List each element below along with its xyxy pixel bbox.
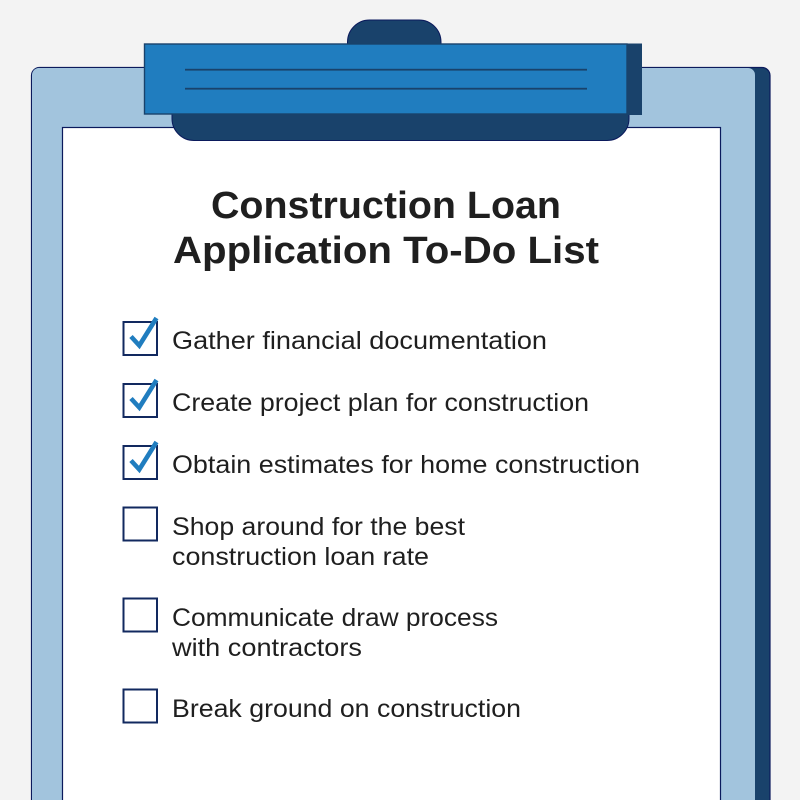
to-do item 4 bbox=[124, 508, 465, 571]
to-do item 2: Create project plan for construction bbox=[172, 389, 589, 417]
title: Construction Loan bbox=[211, 185, 561, 227]
clip line 2 bbox=[185, 88, 587, 90]
paper sheet bbox=[62, 128, 720, 800]
clip front bbox=[144, 44, 627, 114]
to-do item 6: Break ground on construction bbox=[172, 695, 521, 723]
to-do item 4: Shop around for the best bbox=[172, 513, 465, 541]
clip top tab bbox=[348, 20, 441, 46]
title bbox=[173, 185, 599, 272]
to-do item 1 bbox=[124, 318, 547, 355]
to-do item 3 bbox=[124, 442, 640, 479]
to-do item 1: Gather financial documentation bbox=[172, 327, 547, 355]
clip side shadow bbox=[627, 44, 642, 115]
to-do item 2 bbox=[124, 380, 589, 417]
clip line 1 bbox=[185, 69, 587, 71]
to-do item 5 bbox=[124, 598, 498, 662]
clip lower band bbox=[172, 112, 629, 141]
to-do item 5: with contractors bbox=[171, 634, 362, 662]
to-do item 3: Obtain estimates for home construction bbox=[172, 451, 640, 479]
to-do item 5: Communicate draw process bbox=[172, 604, 498, 632]
to-do item 4: construction loan rate bbox=[172, 543, 429, 571]
title: Application To-Do List bbox=[173, 230, 599, 272]
to-do item 6 bbox=[124, 690, 521, 723]
